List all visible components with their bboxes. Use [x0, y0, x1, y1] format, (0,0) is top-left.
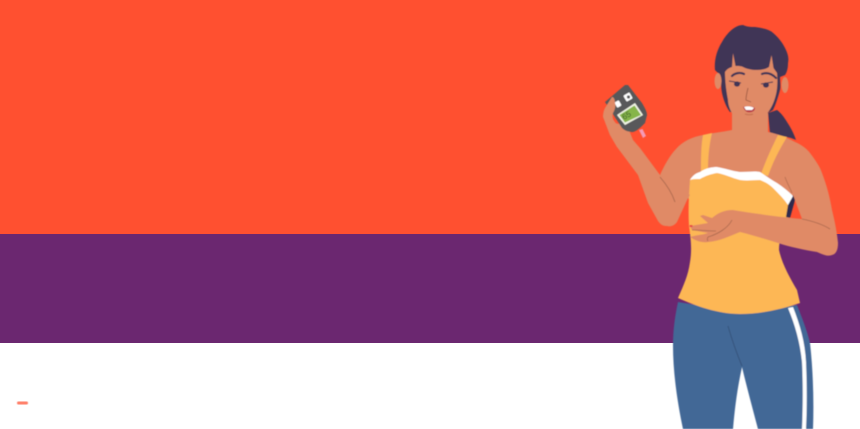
ears: [714, 73, 788, 93]
tank top straps: [701, 133, 787, 176]
forearm and hand on stomach: [690, 210, 838, 256]
arm creases on shoulders: [785, 177, 792, 193]
raised arm: [605, 122, 690, 226]
red speck on white band: [17, 402, 28, 404]
pants: [673, 302, 813, 429]
top white trim: [690, 167, 793, 205]
ponytail: [768, 110, 796, 140]
raised arm crease: [660, 177, 675, 202]
tank top: [678, 171, 800, 314]
top dark side panel: [786, 195, 795, 218]
icon: glucose meter: [605, 85, 647, 138]
panel: purple band: [0, 234, 860, 343]
hand holding meter: [603, 97, 633, 150]
face: [725, 53, 777, 123]
torso, shoulders and upper right arm: [660, 110, 838, 243]
hair: [715, 25, 788, 113]
panel: orange-red band: [0, 0, 860, 234]
eyes, brows, nose and mouth: [729, 73, 776, 115]
figure: woman: [603, 25, 838, 429]
panel: white band: [0, 343, 860, 429]
icon: glucose meter: 65: [620, 109, 633, 122]
